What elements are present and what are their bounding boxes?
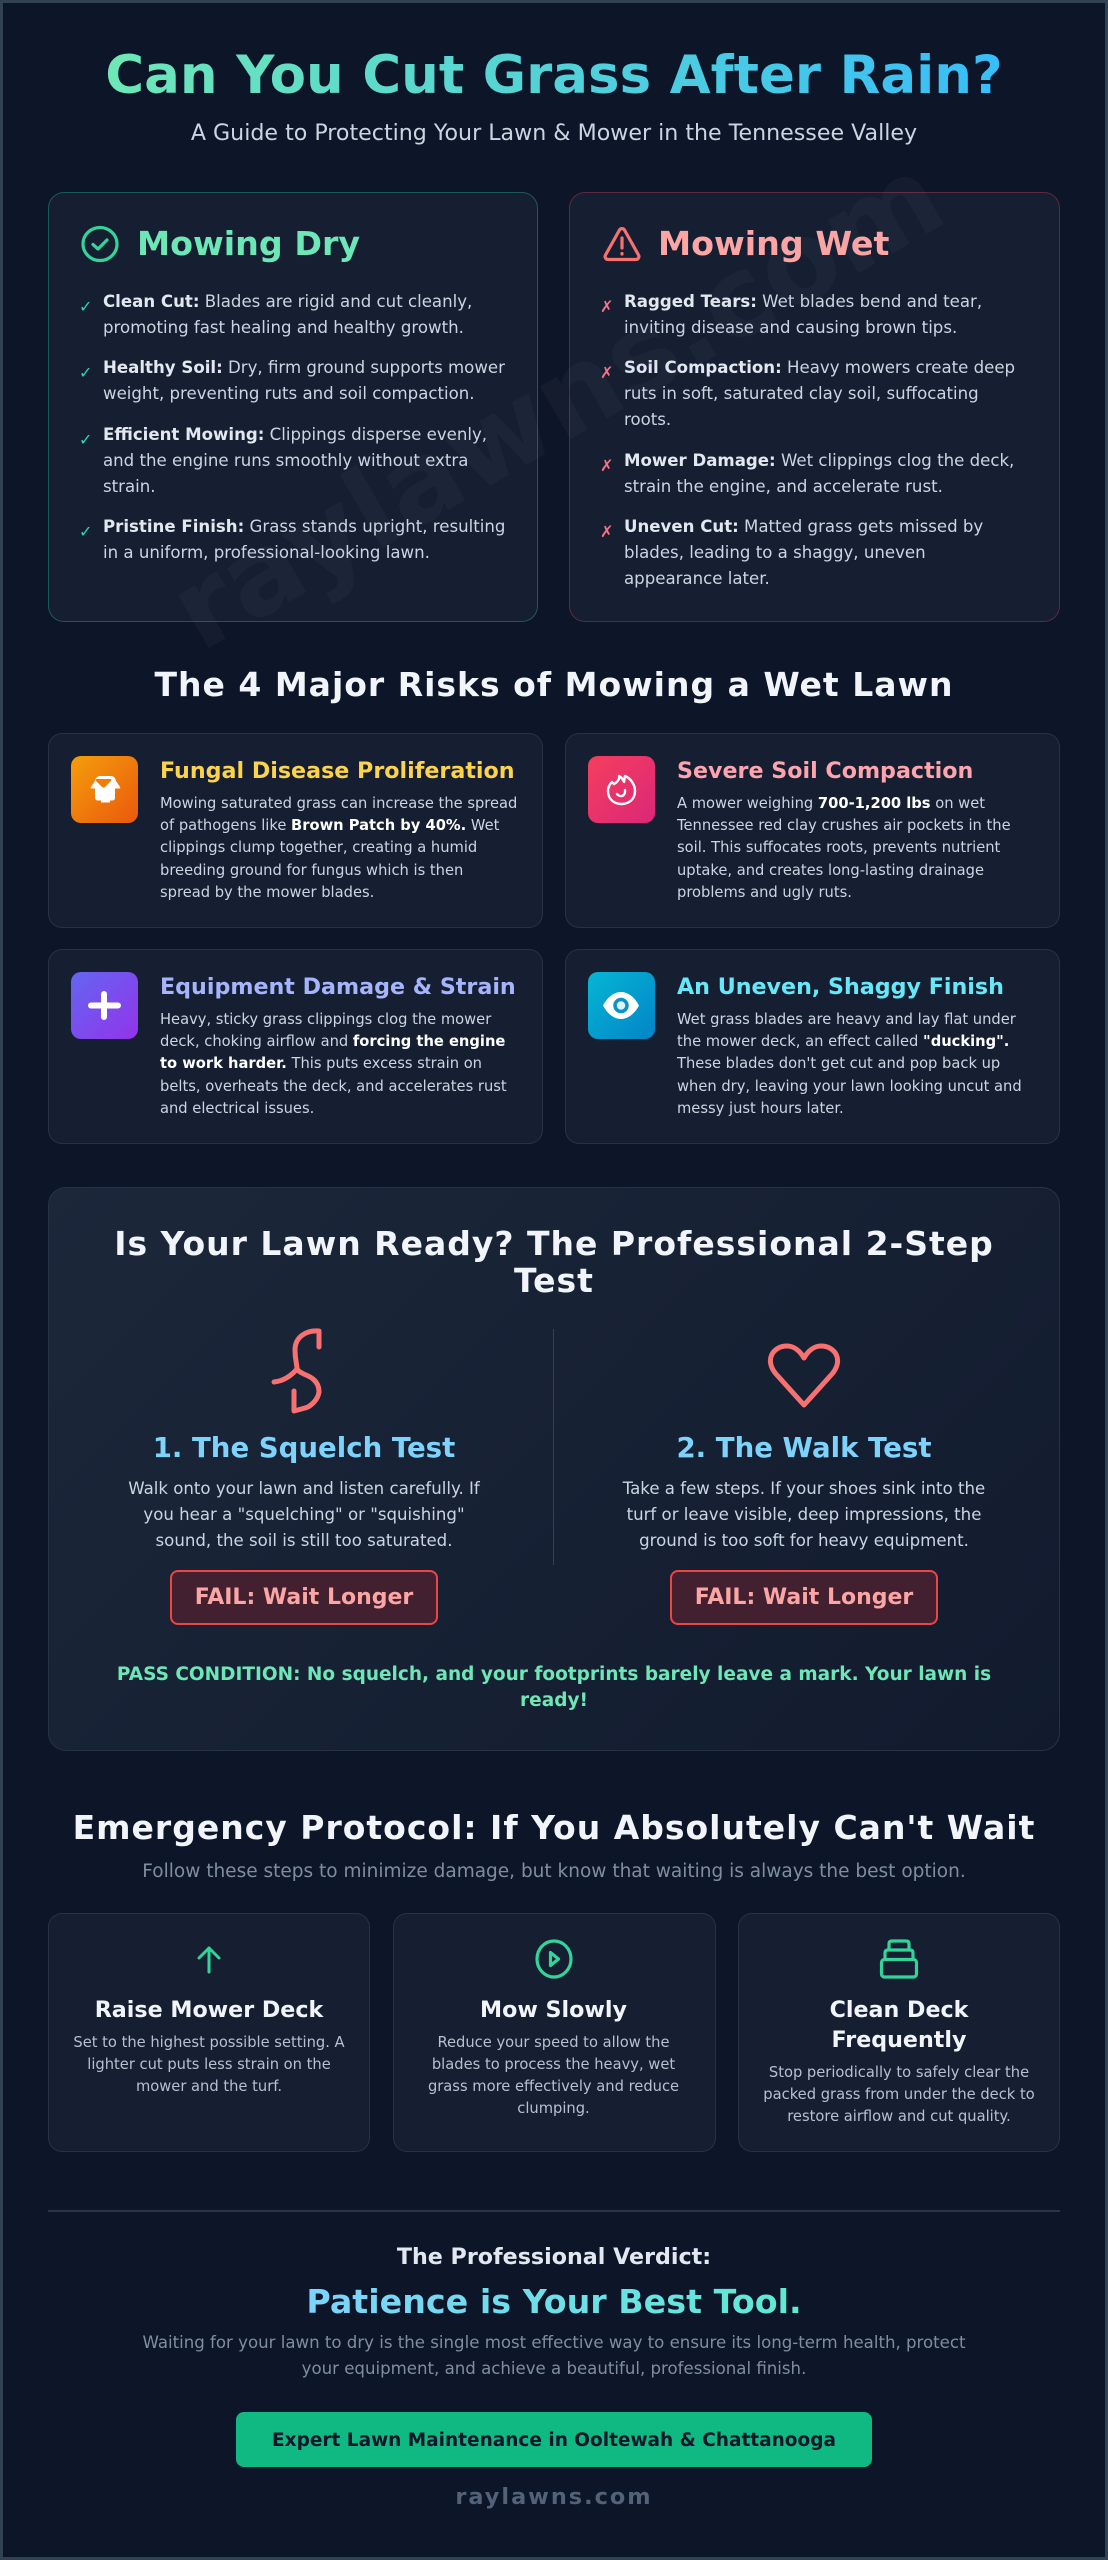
- text: squelch test: [128, 1479, 480, 1550]
- step text: grass more effectively and reduce: [428, 2078, 679, 2095]
- step title: [830, 1997, 969, 2053]
- panel: mowing wet: [569, 192, 1060, 622]
- fail badge: walk: [670, 1570, 938, 1625]
- step text: Reduce your speed to allow the: [437, 2034, 670, 2051]
- pass condition: ready!: [520, 1690, 588, 1710]
- risk description: Wet grass blades are heavy and lay flat under: [677, 1011, 1016, 1028]
- list item: healthy soil: weight, preventing ruts and soil compaction.: [103, 384, 475, 403]
- step text: Stop periodically to safely clear the: [769, 2064, 1029, 2081]
- step text: restore airflow and cut quality.: [787, 2108, 1011, 2125]
- title: Can You Cut Grass After Rain?: [105, 45, 1003, 106]
- list item: soil compaction: Soil Compaction: Heavy mowers create deep: [624, 358, 1015, 377]
- risk description: when dry, leaving your lawn looking uncut and: [677, 1078, 1022, 1095]
- risk description: and electrical issues.: [160, 1100, 314, 1117]
- risk description: [160, 1011, 507, 1117]
- cross mark: ✗: [600, 522, 613, 541]
- icon: eye: [588, 972, 655, 1039]
- subheading: emergency protocol: Follow these steps to minimize damage, but know that waiting is always the best option.: [142, 1861, 966, 1882]
- risk description: A mower weighing 700-1,200 lbs on wet: [677, 795, 985, 812]
- list item: pristine finish: in a uniform, professional-looking lawn.: [103, 543, 430, 562]
- heading: 2-step test: Is Your Lawn Ready? The Professional 2-Step: [114, 1224, 994, 1263]
- risk title: Equipment Damage & Strain: [160, 974, 516, 1000]
- step text: [763, 2064, 1035, 2125]
- list item: ragged tears: [624, 292, 982, 337]
- panel: soil compaction: [565, 733, 1060, 928]
- step text: blades to process the heavy, wet: [432, 2056, 675, 2073]
- icon: play circle: [535, 1939, 573, 1979]
- heading: mowing dry: Mowing Dry: [137, 224, 360, 263]
- icon: warning triangle: [603, 227, 640, 262]
- heading: squelch test: 1. The Squelch Test: [153, 1431, 455, 1464]
- risk description: uptake, and creates long-lasting drainage: [677, 862, 984, 879]
- heading: emergency protocol: Emergency Protocol: If You Absolutely Can't Wait: [73, 1808, 1035, 1847]
- risk description: messy just hours later.: [677, 1100, 844, 1117]
- list item: uneven cut: appearance later.: [624, 569, 770, 588]
- verdict label: The Professional Verdict:: [397, 2244, 711, 2270]
- risk description: deck, choking airflow and forcing the engine: [160, 1033, 505, 1050]
- panel: clean deck: [738, 1913, 1060, 2152]
- risk description: These blades don't get cut and pop back up: [677, 1055, 1000, 1072]
- icon: bug: [71, 756, 138, 823]
- panel: equipment damage: [48, 949, 543, 1144]
- text: walk test: [622, 1479, 985, 1550]
- text: walk test: turf or leave visible, deep impressions, the: [627, 1505, 981, 1524]
- step text: [428, 2034, 679, 2117]
- list item: clean cut: [103, 292, 472, 337]
- list item: healthy soil: [103, 358, 505, 403]
- subtitle: A Guide to Protecting Your Lawn & Mower in the Tennessee Valley: [191, 120, 917, 146]
- risk description: the mower deck, an effect called "ducking".: [677, 1033, 1009, 1050]
- panel: 2-step test: [48, 1187, 1060, 1751]
- divider: [553, 1329, 554, 1565]
- icon: flame: [588, 756, 655, 823]
- risk description: to work harder. This puts excess strain on: [160, 1055, 482, 1072]
- website: raylawns.com: [455, 2484, 653, 2510]
- text: squelch test: you hear a "squelching" or "squishing": [143, 1505, 465, 1524]
- pass condition: [117, 1664, 991, 1710]
- risk description: [160, 795, 517, 901]
- step title: Frequently: [832, 2027, 966, 2053]
- step text: clumping.: [517, 2100, 590, 2117]
- call to action button: Expert Lawn Maintenance in Ooltewah & Chattanooga: [272, 2430, 836, 2451]
- list item: efficient mowing: Efficient Mowing: Clippings disperse evenly,: [103, 425, 487, 444]
- divider: [48, 2210, 1060, 2212]
- heading: 2-step test: [114, 1224, 994, 1300]
- text: walk test: ground is too soft for heavy equipment.: [639, 1531, 969, 1550]
- risk description: of pathogens like Brown Patch by 40%. Wet: [160, 817, 499, 834]
- step text: lighter cut puts less strain on the: [87, 2056, 331, 2073]
- pass condition: PASS CONDITION: No squelch, and your footprints barely leave a mark. Your lawn is: [117, 1664, 991, 1685]
- step title: Raise Mower Deck: [95, 1997, 323, 2023]
- icon: squelch: [272, 1328, 322, 1414]
- step text: Set to the highest possible setting. A: [73, 2034, 345, 2051]
- step title: Mow Slowly: [480, 1997, 627, 2023]
- verdict text: Waiting for your lawn to dry is the single most effective way to ensure its long-term health, protect: [142, 2333, 966, 2352]
- risk description: Heavy, sticky grass clippings clog the mower: [160, 1011, 491, 1028]
- risk description: Tennessee red clay crushes air pockets in the: [677, 817, 1011, 834]
- check mark: ✓: [79, 522, 92, 541]
- risk description: soil. This suffocates roots, prevents nutrient: [677, 839, 1000, 856]
- watermark: raylawns.com: [149, 130, 965, 676]
- panel: mowing dry: [48, 192, 538, 622]
- risk description: clippings clump together, creating a humid: [160, 839, 477, 856]
- risk title: Severe Soil Compaction: [677, 758, 973, 784]
- verdict headline: Patience is Your Best Tool.: [306, 2282, 802, 2321]
- text: squelch test: Walk onto your lawn and listen carefully. If: [128, 1479, 480, 1498]
- fail badge: squelch: FAIL: Wait Longer: [195, 1585, 413, 1610]
- risk description: breeding ground for fungus which is then: [160, 862, 463, 879]
- list item: pristine finish: [103, 517, 505, 562]
- list item: uneven cut: Uneven Cut: Matted grass gets missed by: [624, 517, 983, 536]
- cross mark: ✗: [600, 456, 613, 475]
- list item: mower damage: Mower Damage: Wet clippings clog the deck,: [624, 451, 1014, 470]
- panel: fungal disease: [48, 733, 543, 928]
- check mark: ✓: [79, 363, 92, 382]
- heading: mowing wet: Mowing Wet: [658, 224, 889, 263]
- call to action button: [236, 2412, 872, 2467]
- panel: uneven finish: [565, 949, 1060, 1144]
- verdict text: [142, 2333, 966, 2378]
- list item: clean cut: promoting fast healing and healthy growth.: [103, 318, 464, 337]
- list item: efficient mowing: [103, 425, 487, 496]
- list item: efficient mowing: and the engine runs smoothly without extra: [103, 451, 468, 470]
- risk description: belts, overheats the deck, and accelerates rust: [160, 1078, 507, 1095]
- check mark: ✓: [79, 297, 92, 316]
- risk description: [676, 1011, 1022, 1117]
- icon: arrow up: [197, 1946, 221, 1974]
- list item: soil compaction: roots.: [624, 410, 671, 429]
- risk title: An Uneven, Shaggy Finish: [677, 974, 1004, 1000]
- list item: healthy soil: Healthy Soil: Dry, firm ground supports mower: [103, 358, 505, 377]
- icon: deck: [880, 1939, 918, 1979]
- list item: soil compaction: ruts in soft, saturated clay soil, suffocating: [624, 384, 979, 403]
- panel: raise mower deck: [48, 1913, 370, 2152]
- fail badge: walk: FAIL: Wait Longer: [695, 1585, 913, 1610]
- list item: clean cut: Clean Cut: Blades are rigid and cut cleanly,: [103, 292, 472, 311]
- heading: major risks: The 4 Major Risks of Mowing a Wet Lawn: [155, 665, 953, 704]
- step text: packed grass from under the deck to: [763, 2086, 1035, 2103]
- list item: ragged tears: Ragged Tears: Wet blades bend and tear,: [624, 292, 982, 311]
- risk title: Fungal Disease Proliferation: [160, 758, 515, 784]
- list item: mower damage: strain the engine, and accelerate rust.: [624, 477, 943, 496]
- heading: 2-step test: Test: [514, 1261, 594, 1300]
- icon: plus: [71, 972, 138, 1039]
- risk description: Mowing saturated grass can increase the spread: [160, 795, 517, 812]
- cross mark: ✗: [600, 297, 613, 316]
- fail badge: squelch: [170, 1570, 438, 1625]
- list item: soil compaction: [624, 358, 1015, 429]
- icon: check circle: [81, 226, 119, 262]
- panel: mow slowly: [392, 1913, 716, 2152]
- list item: ragged tears: inviting disease and causing brown tips.: [624, 318, 957, 337]
- risk description: problems and ugly ruts.: [677, 884, 852, 901]
- list item: uneven cut: blades, leading to a shaggy, uneven: [624, 543, 926, 562]
- text: squelch test: sound, the soil is still too saturated.: [156, 1531, 452, 1550]
- list item: pristine finish: Pristine Finish: Grass stands upright, resulting: [103, 517, 505, 536]
- check mark: ✓: [79, 430, 92, 449]
- cross mark: ✗: [600, 363, 613, 382]
- step text: mower and the turf.: [136, 2078, 282, 2095]
- heading: walk test: 2. The Walk Test: [676, 1431, 932, 1464]
- list item: efficient mowing: strain.: [103, 477, 156, 496]
- risk description: [676, 795, 1011, 901]
- text: walk test: Take a few steps. If your shoes sink into the: [623, 1479, 985, 1498]
- step title: Clean Deck: [830, 1997, 968, 2023]
- verdict text: your equipment, and achieve a beautiful, professional finish.: [302, 2359, 806, 2378]
- risk description: spread by the mower blades.: [160, 884, 374, 901]
- icon: heart: [768, 1344, 840, 1408]
- list item: uneven cut: [624, 517, 983, 588]
- step text: [73, 2034, 345, 2095]
- list item: mower damage: [624, 451, 1014, 496]
